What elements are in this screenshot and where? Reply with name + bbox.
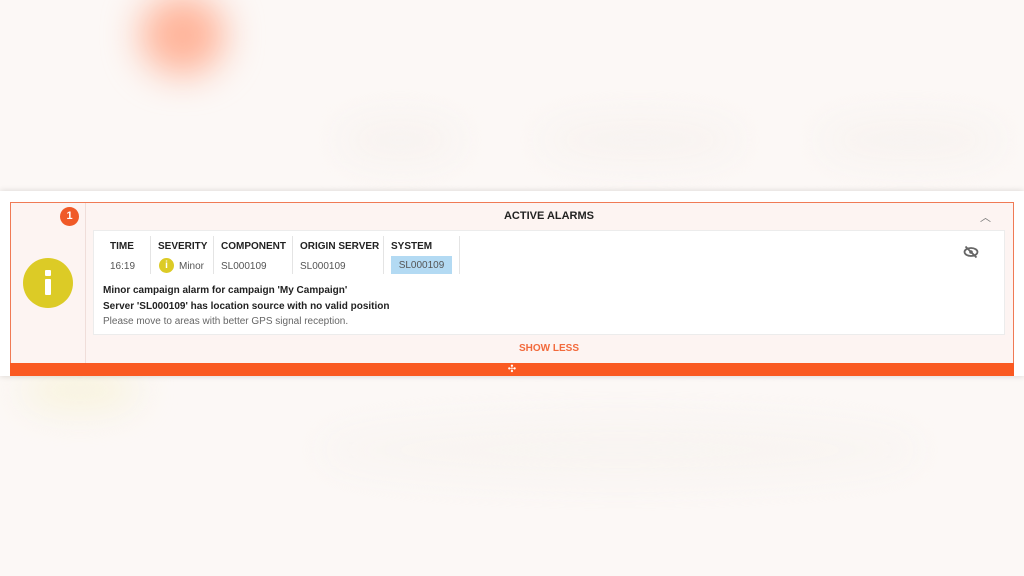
icon: big info	[23, 258, 73, 308]
system tag: SL000109	[399, 260, 444, 271]
background blurred blob: orange	[140, 0, 225, 75]
icon: collapse chevron: ︿	[980, 212, 991, 224]
bar: resize handle: ✣	[508, 364, 516, 375]
table values: 16:19	[110, 261, 135, 272]
panel: active alarms	[10, 202, 1014, 376]
badge: count	[60, 207, 79, 226]
text: COMPONENT	[221, 241, 286, 252]
text: alarm message	[103, 285, 390, 327]
system tag	[391, 256, 452, 274]
card: alarm details	[93, 230, 1005, 335]
text: ORIGIN SERVER	[300, 241, 379, 252]
panel: alarm strip	[0, 191, 1024, 376]
icon: small info: i	[165, 260, 168, 271]
bar: resize handle	[10, 363, 1014, 376]
icon: hidden eye	[964, 246, 978, 258]
table header: TIME	[110, 241, 134, 252]
text: SL000109	[300, 261, 346, 272]
text: SYSTEM	[391, 241, 432, 252]
icon: small info	[159, 258, 174, 273]
text: alarm message: Minor campaign alarm for campaign 'My Campaign'	[103, 285, 347, 296]
text: alarm message: Server 'SL000109' has location source with no valid position	[103, 301, 390, 312]
divider left column	[85, 203, 86, 363]
text: Minor	[179, 261, 204, 272]
button: show less: SHOW LESS	[519, 343, 579, 354]
text: SL000109	[221, 261, 267, 272]
text: SEVERITY	[158, 241, 207, 252]
text: alarm message: Please move to areas with better GPS signal reception.	[103, 316, 348, 327]
badge: count: 1	[66, 210, 73, 222]
title: ACTIVE ALARMS	[504, 210, 594, 222]
